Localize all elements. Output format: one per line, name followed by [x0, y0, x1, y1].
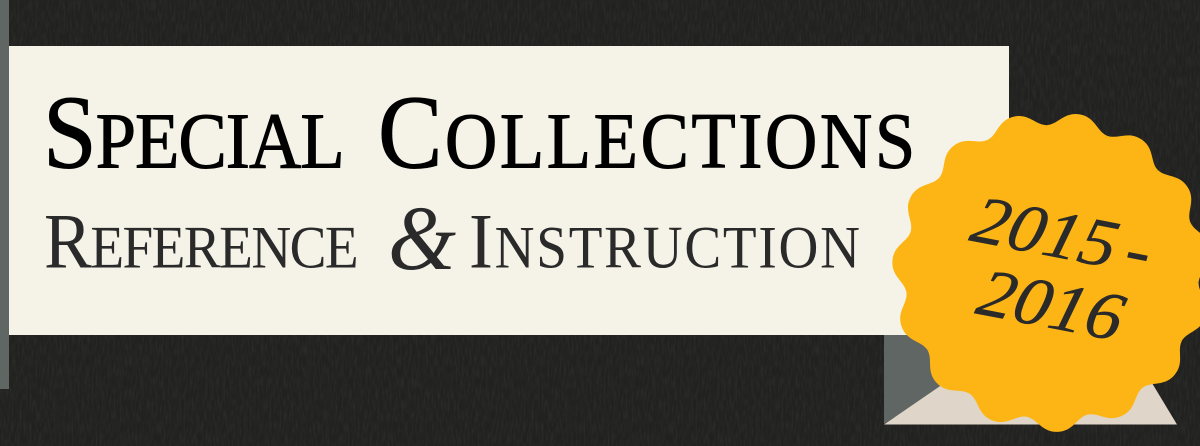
subtitle: Reference & Instruction: & [388, 187, 456, 289]
folded ribbon behind the badge [884, 330, 1177, 424]
title: Special Collections [43, 74, 915, 190]
badge text: 2015 - 2016: 2016 [970, 255, 1132, 356]
subtitle: Reference & Instruction: REFERENCE [44, 199, 359, 285]
badge text: 2015 - 2016 [964, 182, 1161, 356]
title panel [9, 46, 1009, 335]
title: Special Collections: COLLECTIONS [378, 74, 915, 190]
badge: scalloped yellow seal [890, 109, 1200, 433]
badge text: 2015 - 2016: 2015 - [964, 182, 1161, 289]
left grey edge bar [0, 0, 9, 389]
subtitle: Reference & Instruction [44, 187, 860, 289]
title: Special Collections: SPECIAL [43, 74, 345, 190]
subtitle: Reference & Instruction: INSTRUCTION [469, 199, 860, 285]
